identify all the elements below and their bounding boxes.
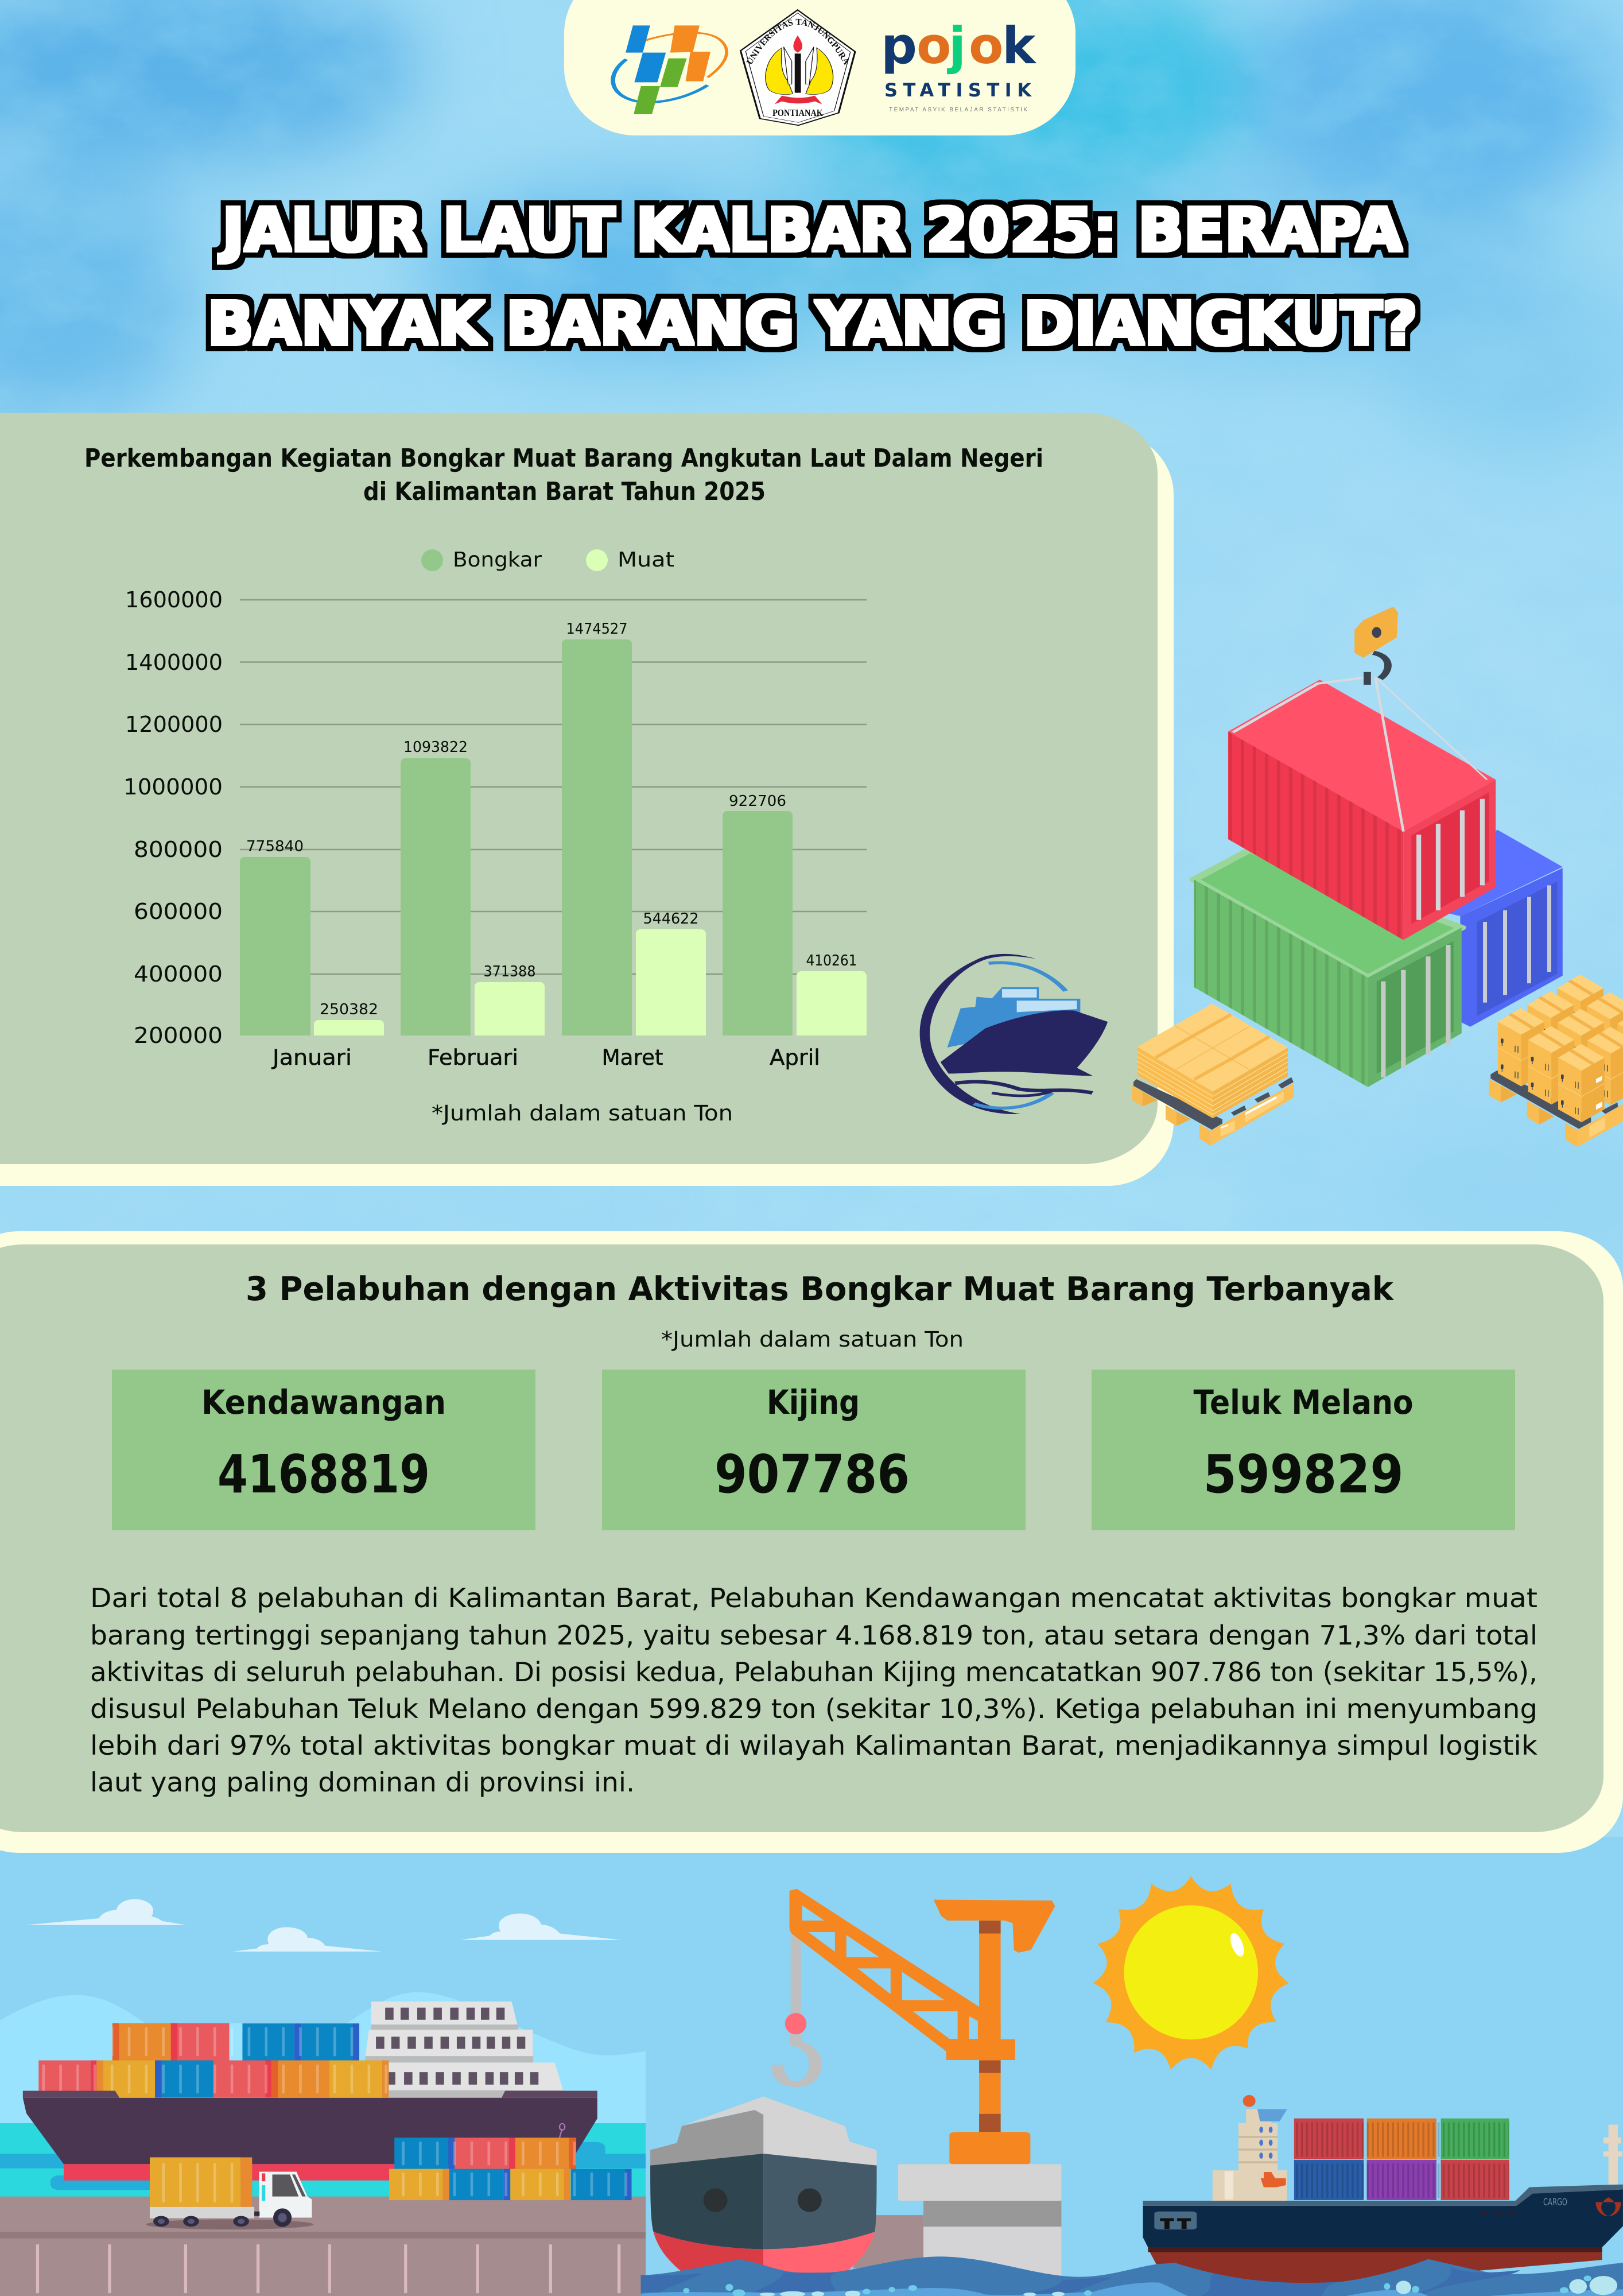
bar chart: Maret [601,1045,663,1070]
stat card: Kijing: 907786 [715,1444,910,1505]
ship name label: CARGO [1543,2197,1567,2208]
bar chart: 1093822 [403,739,468,756]
bar chart: 544622 [643,910,699,928]
logo: Universitas Tanjungpura shield [739,9,856,126]
bar chart: Februari [428,1045,518,1070]
bar chart: April [770,1045,820,1070]
chart legend: Muat [618,548,674,572]
stat card: Teluk Melano: 599829 [1203,1444,1404,1505]
logo: BPS [613,25,727,114]
bar chart: 800000 [134,837,223,862]
chart legend [421,548,674,572]
paragraph: aktivitas di seluruh pelabuhan. Di posisi kedua, Pelabuhan Kijing mencatatkan 907.786 ton (sekitar 15,5%), [90,1657,1537,1688]
chart heading: di Kalimantan Barat Tahun 2025 [363,477,766,506]
logo: Pojok Statistik: STATISTIK [884,79,1032,101]
logo: Pojok Statistik: k [1002,16,1037,75]
bar chart: 200000 [134,1023,223,1048]
quay container stack [389,2123,632,2200]
bar chart: 410261 [806,952,857,969]
paragraph: disusul Pelabuhan Teluk Melano dengan 599.829 ton (sekitar 10,3%). Ketiga pelabuhan ini menyumbang [90,1693,1537,1724]
bar chart: 600000 [134,899,223,924]
chart legend: Bongkar [453,548,542,572]
bar chart: 1400000 [125,650,223,675]
bar chart: 922706 [729,793,786,810]
ship hull [23,2091,597,2181]
stat card: Kijing [602,1370,1026,1530]
sea waves [641,2256,1623,2296]
sea foam and bubbles [641,2267,1623,2296]
logo: Pojok Statistik: j [947,16,966,75]
bar chart: 1200000 [125,712,223,737]
bar chart: 250382 [320,1001,378,1018]
bar chart [123,587,867,1070]
crane pier base [853,2164,1061,2278]
icon: sun [1093,1876,1289,2070]
panel: chart [0,413,1174,1186]
ports unit note: *Jumlah dalam satuan Ton [661,1327,964,1352]
paragraph: laut yang paling dominan di provinsi ini. [90,1767,635,1798]
illustration: cargo ship at quay [0,1899,646,2296]
logo: Universitas Tanjungpura shield: UNIVERSITAS TANJUNGPURA [746,18,849,65]
truck [146,2157,313,2229]
chart heading: Perkembangan Kegiatan Bongkar Muat Barang Angkutan Laut Dalam Negeri [84,444,1043,473]
paragraph [90,1583,1537,1798]
icon: boxes on pallet [1489,975,1623,1147]
bar chart: 1600000 [125,587,223,612]
panel: top ports [0,1231,1623,1853]
paragraph: Dari total 8 pelabuhan di Kalimantan Barat, Pelabuhan Kendawangan mencatat aktivitas bongkar muat [90,1583,1537,1614]
quay scene backdrop [0,1992,646,2296]
logo: Pojok Statistik: TEMPAT ASYIK BELAJAR STATISTIK [889,107,1027,113]
front-view ship [650,2096,877,2277]
ship superstructure [366,2002,564,2098]
paragraph: barang tertinggi sepanjang tahun 2025, yaitu sebesar 4.168.819 ton, atau setara dengan 71,3% dari total [90,1620,1537,1651]
title: JALUR LAUT KALBAR 2025: BERAPA [219,195,1402,265]
bar chart: 400000 [134,961,223,987]
logo: Pojok Statistik: p [881,16,917,75]
stat card: Kendawangan [112,1370,535,1530]
icon: flat stacked pallet [1132,1003,1294,1146]
stat card: Kendawangan: Kendawangan [201,1383,446,1422]
logo: Pojok Statistik [881,16,1037,113]
chart heading [84,444,1043,506]
clouds [25,1899,622,1952]
bar chart: 1000000 [123,774,223,800]
logo pill [564,0,1075,135]
logo: Pojok Statistik: o [917,16,951,75]
logo: Pojok Statistik: o [969,16,1003,75]
icon: ship emblem [920,954,1108,1114]
icon: red container lifted by hook [1228,607,1496,940]
bar chart: 775840 [246,838,304,855]
ports heading: 3 Pelabuhan dengan Aktivitas Bongkar Muat Barang Terbanyak [246,1270,1394,1308]
paragraph: lebih dari 97% total aktivitas bongkar muat di wilayah Kalimantan Barat, menjadikannya simpul logistik [90,1730,1537,1761]
icon: blue container [1443,829,1563,1027]
chart unit note: *Jumlah dalam satuan Ton [432,1101,733,1126]
ship deck containers [38,2023,389,2097]
bar chart: Januari [271,1045,352,1070]
bar chart: 371388 [483,963,536,980]
stat card: Teluk Melano [1092,1370,1515,1530]
stat card: Kendawangan: 4168819 [218,1444,430,1505]
title [207,195,1418,359]
stat card: Teluk Melano: Teluk Melano [1194,1383,1413,1422]
illustration: containers [920,607,1563,1114]
stat card: Kijing: Kijing [767,1383,860,1422]
logo: Universitas Tanjungpura shield: PONTIANAK [772,107,824,118]
cargo ship side view [1143,2095,1623,2284]
illustration: crane, sun, ships and sea [641,1876,1623,2296]
bar chart: 1474527 [566,620,628,638]
icon: green container [1194,850,1462,1087]
icon: crane [778,1889,1055,2165]
title: BANYAK BARANG YANG DIANGKUT? [207,289,1418,359]
